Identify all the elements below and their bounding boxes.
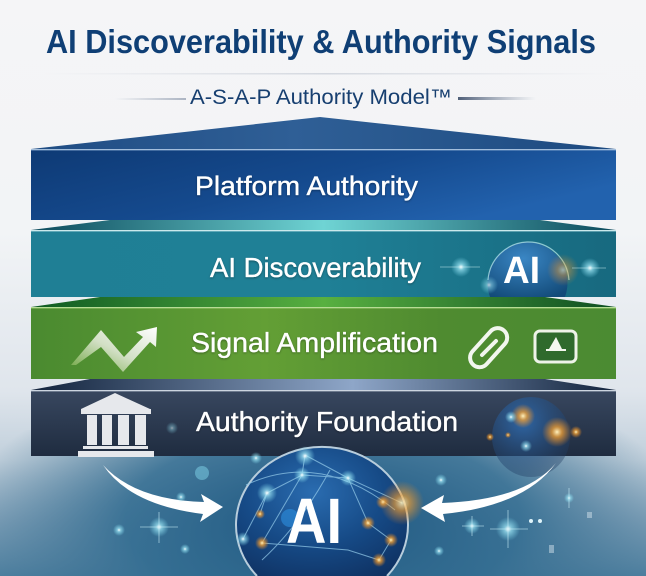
globe network lines <box>243 455 402 560</box>
pyramid roof <box>31 117 616 149</box>
subtitle <box>115 86 536 109</box>
icon: video frame <box>535 331 576 362</box>
label: Signal Amplification: Signal Amplification <box>191 327 438 358</box>
subtitle: A-S-A-P Authority Model™ <box>190 86 452 109</box>
layer separator <box>31 220 616 230</box>
label: AI Discoverability: AI Discoverability <box>210 252 421 283</box>
icon: rising arrow <box>71 327 157 372</box>
divider <box>43 73 609 74</box>
icon: network globe <box>486 397 582 477</box>
label: Authority Foundation: Authority Foundation <box>196 406 458 437</box>
icon: link <box>466 324 511 371</box>
title: AI Discoverability & Authority Signals <box>46 23 596 60</box>
label: Platform Authority: Platform Authority <box>195 171 419 201</box>
arrow: right into globe <box>421 463 556 522</box>
icon: AI globe: AI <box>503 250 540 292</box>
star particles <box>113 422 592 556</box>
layer: Authority Foundation <box>31 390 616 477</box>
layer: Platform Authority <box>31 149 616 220</box>
icon: AI globe <box>440 242 606 297</box>
AI label on globe: AI <box>286 485 342 557</box>
central AI globe <box>236 446 424 576</box>
icon: institution building <box>78 393 154 457</box>
layer separator <box>31 379 616 390</box>
layer: Signal Amplification <box>31 307 616 379</box>
layer: AI Discoverability <box>31 230 616 297</box>
arrow: left into globe <box>103 465 223 522</box>
globe glowing nodes <box>236 446 424 567</box>
layer separator <box>31 297 616 307</box>
